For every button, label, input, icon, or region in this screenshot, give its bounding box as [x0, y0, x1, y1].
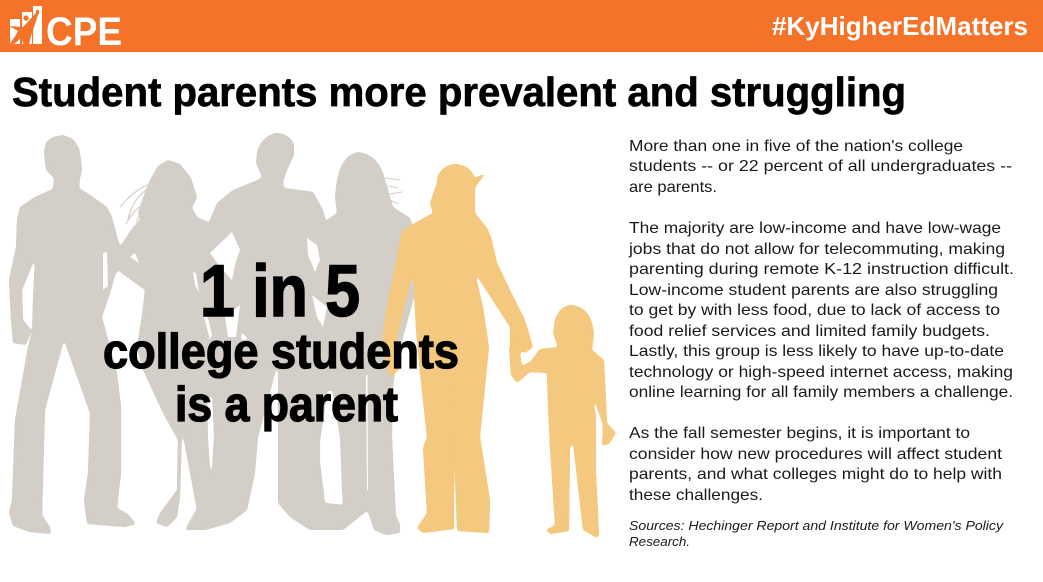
woman 4 upper body: [318, 152, 418, 395]
text block: intro paragraph: students -- or 22 percent of all undergraduates --: [629, 158, 1012, 175]
CPE logo: CPE: [46, 10, 122, 54]
callout: 1 in 5 college students is a parent: is a parent: [175, 378, 398, 432]
text block: challenges paragraph: [628, 220, 1014, 401]
text block: intro paragraph: [629, 138, 1012, 196]
hair wisps: [120, 178, 402, 224]
CPE logo: [9, 6, 122, 54]
text block: closing paragraph: consider how new procedures will affect student: [629, 446, 1003, 463]
text block: closing paragraph: these challenges.: [629, 487, 763, 504]
text block: intro paragraph: More than one in five of the nation's college: [629, 138, 963, 155]
text block: challenges paragraph: online learning for all family members a challenge.: [629, 384, 1013, 401]
text block: intro paragraph: are parents.: [629, 179, 717, 196]
text block: challenges paragraph: jobs that do not allow for telecommuting, making: [628, 241, 1005, 258]
silhouette: mother in orange: [382, 164, 533, 533]
callout: 1 in 5 college students is a parent: college students: [103, 325, 459, 379]
text block: challenges paragraph: Low-income student parents are also struggling: [629, 282, 998, 299]
white gaps between figures: [103, 232, 368, 490]
sources: Sources: Hechinger Report and Institute for Women's Policy: [629, 518, 1005, 533]
text block: closing paragraph: As the fall semester begins, it is important to: [629, 425, 970, 442]
text block: challenges paragraph: technology or high-speed internet access, making: [629, 364, 1013, 381]
text block: challenges paragraph: to get by with less food, due to lack of access to: [629, 302, 1000, 319]
man 3 left leg and foot: [185, 340, 277, 530]
silhouettes: four adults in grey: [9, 133, 418, 535]
man 3 upper body: [208, 133, 338, 375]
title: Student parents more prevalent and struggling: [12, 69, 906, 115]
hashtag: #KyHigherEdMatters: [772, 11, 1028, 41]
text block: challenges paragraph: parenting during remote K-12 instruction difficult.: [629, 261, 1014, 278]
text block: closing paragraph: parents, and what colleges might do to help with: [629, 466, 1002, 483]
text block: challenges paragraph: food relief services and limited family budgets.: [629, 323, 990, 340]
header bar: [0, 0, 1043, 54]
text block: closing paragraph: [629, 425, 1003, 504]
text block: challenges paragraph: Lastly, this group is less likely to have up-to-date: [629, 343, 1004, 360]
man 3 right leg and foot: [278, 350, 368, 530]
woman 4 legs: [330, 375, 400, 535]
man 1: [9, 135, 136, 534]
callout: 1 in 5 college students is a parent: 1 in 5: [200, 251, 360, 332]
sources: [629, 518, 1005, 549]
callout: 1 in 5 college students is a parent: [103, 251, 459, 432]
silhouette: child in orange: [509, 305, 616, 538]
sources: Research.: [629, 534, 690, 549]
woman 2 upper body and legs: [118, 160, 245, 527]
text block: challenges paragraph: The majority are low-income and have low-wage: [629, 220, 1001, 237]
